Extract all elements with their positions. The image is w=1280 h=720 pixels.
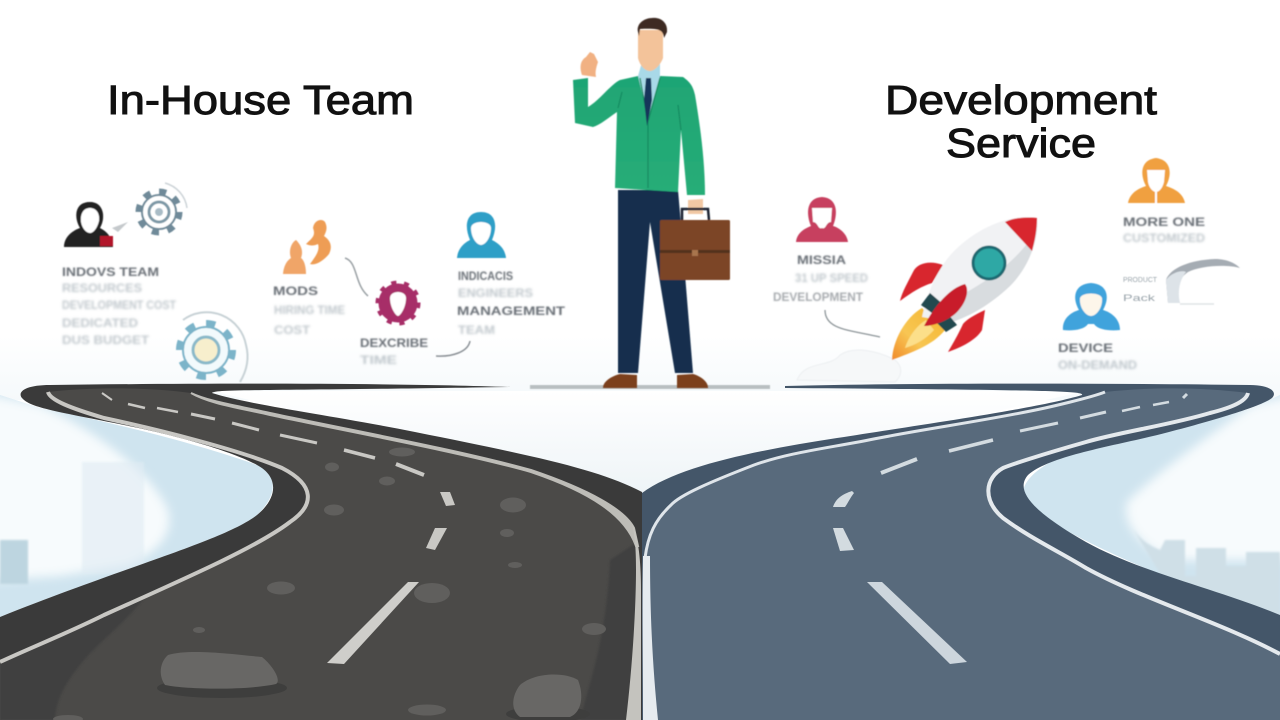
briefcase handle [682,209,709,220]
text block: first service item: DEVELOPMENT [773,292,863,304]
lane dashes right [833,394,1187,551]
panel: right scenery with lake and skyline [1015,390,1280,620]
panel: in-house team items [62,183,565,382]
text block: second team item: HIRING TIME [274,305,345,317]
text block: third service item: ON-DEMAND [1058,360,1137,372]
edge line top right [645,392,1105,558]
text block: first team item: DEDICATED [62,318,138,330]
text block: first service item: MISSIA [797,255,846,267]
heading: In-House Team: In-House Team [107,77,414,123]
text block: first team item: RESOURCES [62,283,142,295]
figure raised hand [581,52,598,77]
text block: third team item: DEXCRIBE [360,338,428,350]
rocket bands [921,293,945,316]
road surface left [0,384,642,720]
text block: second service item: MORE ONE [1123,217,1205,229]
panel: left scenery with lake and skyline [0,390,280,620]
figure head [638,30,663,71]
rocket body [922,217,1037,322]
text block: second team item: COST [274,325,310,337]
edge strip left [626,524,641,720]
figure shoes [603,374,708,388]
text block: management item [457,271,565,337]
figure hair [638,18,667,38]
figure shirt and neck [638,62,663,115]
figure jacket seams [618,78,681,188]
text block: first service item [773,255,868,304]
connector curve [345,258,368,296]
edge strip right [643,556,658,720]
panel: development service items [773,158,1240,382]
text block: device captions [1123,277,1158,303]
icon: gear bottom [180,312,248,382]
icon: orange people [283,220,331,274]
briefcase [660,220,730,280]
text block: first team item: DEVELOPMENT COST [62,300,176,312]
icon: blue person [457,212,506,258]
text block: third service item [1058,343,1137,372]
background [0,0,1280,400]
worn darker patches left [0,540,640,720]
text block: third team item [360,338,428,367]
panel: left rough road [0,384,642,720]
text block: management item: TEAM [458,325,495,337]
figure trousers [618,190,693,373]
text block: first service item: 31 UP SPEED [795,273,868,285]
text block: device captions: PRODUCT [1123,277,1158,284]
icon: magenta gear person [378,283,418,323]
icon: orange person [1128,158,1185,203]
text block: second service item [1123,217,1205,245]
text block: first team item [62,267,176,347]
text block: second team item [273,286,345,337]
big lane dash left [327,582,419,664]
icon: red person [796,197,848,242]
rocket centre fin [924,284,967,326]
figure tie [644,78,652,126]
edge line outer left [0,392,308,662]
text block: management item: MANAGEMENT [457,306,565,318]
text block: management item: INDICACIS [458,271,513,283]
icon: person with hair [64,202,113,247]
lane dashes left [102,393,455,550]
figure: businessman with briefcase [573,18,730,388]
potholes and rocks [53,448,606,720]
rocket flame [892,308,945,360]
rocket nose [1005,217,1037,251]
icon: pointer triangle [112,222,128,232]
icon: gear top [139,183,187,232]
text block: second service item: CUSTOMIZED [1123,233,1205,245]
smoke cloud [797,350,901,382]
lane surface left [0,388,638,720]
text block: device captions: Pack [1123,293,1156,303]
text block: management item: ENGINEERS [458,288,533,300]
heading: Development Service: Development [885,77,1158,123]
rocket fins [900,263,943,301]
panel: centre white triangle between the roads [212,391,1085,493]
icon: device illustration [1166,259,1240,304]
panel: right smooth road [642,384,1280,720]
text block: third team item: TIME [360,355,397,367]
text block: first team item: DUS BUDGET [62,335,149,347]
icon: blue person [1063,283,1120,330]
rocket window [973,247,1005,279]
text block: second team item: MODS [273,286,318,298]
icon: rocket [892,217,1037,360]
figure jacket [573,76,705,195]
big lane dash right [867,582,967,664]
edge line lower right [988,393,1280,654]
figure lower hand [688,199,703,214]
connector curve to rocket [825,310,880,337]
road surface right [642,384,1280,720]
connector arrow [436,341,470,356]
text block: third service item: DEVICE [1058,343,1113,355]
lane surface right [645,388,1280,720]
text block: first team item: INDOVS TEAM [62,267,159,279]
heading: Development Service: Service [946,120,1096,166]
edge line inner left [191,393,638,546]
ground shadow under figure [530,385,770,389]
